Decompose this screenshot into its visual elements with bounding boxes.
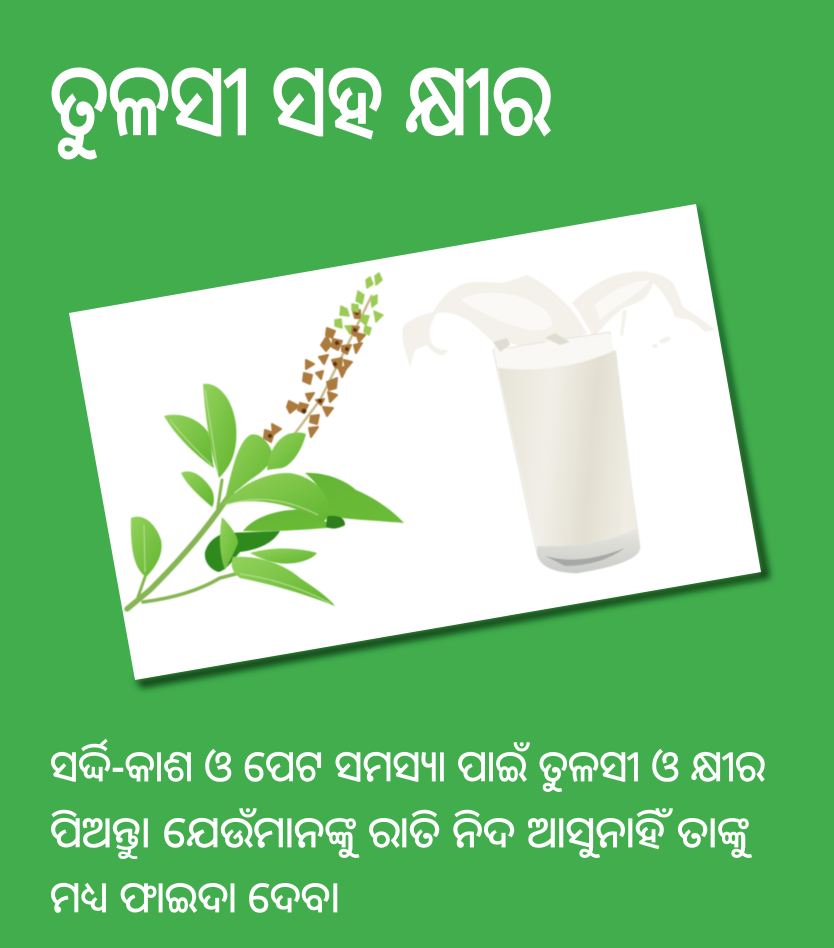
tulsi stems [127, 455, 270, 609]
milk splash [402, 271, 715, 367]
glass [493, 332, 640, 573]
tulsi seed spike [264, 273, 383, 442]
milk in glass [498, 350, 637, 546]
body text [50, 738, 765, 922]
tulsi leaf veins [144, 390, 330, 603]
glass foam [494, 335, 613, 367]
card background [69, 204, 761, 680]
glass base [537, 528, 640, 573]
body text: ମଧ୍ୟ ଫାଇଦା ଦେବ। [50, 874, 340, 922]
body text: ପିଅନ୍ତୁ। ଯେଉଁମାନଙ୍କୁ ରାତି ନିଦ ଆସୁନାହିଁ ତାଙ୍କୁ [50, 808, 749, 856]
illustration: glass of milk with splash [402, 271, 715, 573]
tulsi right leaves [243, 473, 404, 531]
card shadow [135, 204, 770, 688]
splash highlights [460, 280, 650, 330]
title: ତୁଳସୀ ସହ କ୍ଷୀର [50, 45, 551, 155]
illustration: tulsi sprig [127, 273, 404, 609]
tulsi light leaves [131, 384, 335, 606]
tulsi shadow leaf [205, 531, 280, 572]
body text: ସର୍ଦ୍ଦି-କାଶ ଓ ପେଟ ସମସ୍ୟା ପାଇଁ ତୁଳସୀ ଓ କ୍ଷୀର [50, 743, 765, 791]
foam shadow bits [493, 333, 570, 352]
